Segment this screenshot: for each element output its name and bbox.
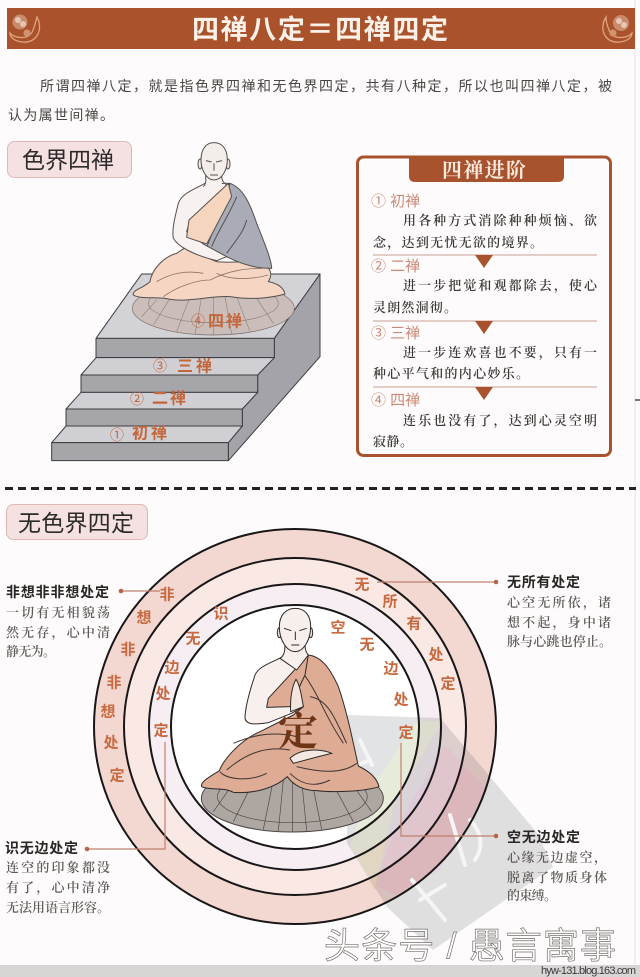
- icon: right lotus and crescent: [603, 15, 632, 42]
- callout: 无所有处定: 脉与心跳也停止。: [507, 634, 612, 649]
- stage 3: [371, 321, 597, 381]
- callout: 识无边处定: 无法用语言形容。: [6, 900, 110, 915]
- step labels: [110, 312, 242, 443]
- stage 1: ① 初禅: [371, 193, 420, 210]
- step labels: 初禅: [132, 424, 167, 442]
- ring labels: 非想非非想处定: [100, 586, 175, 784]
- callout: 空无边处定: 的束缚。: [507, 888, 557, 903]
- callout: 空无边处定: 心缘无边虚空，: [507, 850, 607, 866]
- heading: 色界四禅: 色界四禅: [22, 147, 114, 173]
- heading: 无色界四定: 无色界四定: [18, 510, 134, 536]
- icon: left lotus and crescent: [10, 14, 40, 42]
- callout: 无所有处定: 心空无所依，诸: [507, 595, 611, 611]
- title banner: [7, 8, 635, 49]
- step labels: ③: [153, 358, 167, 374]
- ring labels: 空无边处定: [330, 618, 414, 742]
- stage 4: 连乐也没有了，达到心灵空明: [403, 413, 597, 429]
- stage 3: 进一步连欢喜也不要，只有一: [403, 345, 597, 361]
- ring labels: 非想非非想处定: 非: [159, 586, 175, 604]
- stage 3: 种心平气和的内心妙乐。: [373, 366, 529, 381]
- ring labels: 无所有处定: [354, 576, 456, 692]
- stage 2: ② 二禅: [371, 258, 420, 275]
- stage 2: 灵朗然洞彻。: [373, 300, 457, 315]
- ring labels: 识无边处定: 定: [153, 722, 169, 740]
- stage 4: 寂静。: [373, 434, 413, 449]
- ring labels: 识无边处定: 识: [213, 606, 229, 622]
- callout: 非想非非想处定: 然无存，心中清: [6, 625, 110, 641]
- ring labels: 识无边处定: 边: [164, 658, 180, 676]
- callout: 非想非非想处定: 一切有无相貌荡: [6, 605, 110, 620]
- concentric rings diagram: [94, 529, 553, 950]
- step labels: 三禅: [177, 358, 212, 376]
- callout: 非想非非想处定: 静无为。: [6, 644, 56, 659]
- stairs: [52, 274, 320, 461]
- ring labels: 非想非非想处定: 定: [109, 766, 125, 784]
- stage 4: [371, 387, 597, 449]
- stage 2: 进一步把觉和观都除去，使心: [403, 278, 599, 294]
- ring outlines: [94, 529, 496, 924]
- stage 3: ③ 三禅: [371, 325, 420, 342]
- step labels: 二禅: [152, 390, 186, 408]
- ring labels: 非想非非想处定: 非: [120, 642, 136, 658]
- bottom scan band: [0, 965, 640, 977]
- ring labels: 空无边处定: 处: [393, 690, 409, 708]
- heading: 色界四禅: [8, 142, 132, 178]
- stage 2: [371, 255, 599, 315]
- watermark seal: [347, 715, 553, 950]
- callout: 非想非非想处定: [6, 584, 160, 659]
- callout: 识无边处定: 连空的印象都没: [6, 860, 110, 875]
- callout: 识无边处定: [5, 742, 165, 915]
- intro paragraph: 认为属世间禅。: [8, 107, 114, 123]
- stage 1: 念，达到无忧无欲的境界。: [373, 235, 543, 251]
- ring labels: 识无边处定: 无: [185, 630, 201, 648]
- ring labels: 无所有处定: 有: [406, 616, 422, 632]
- ring labels: 非想非非想处定: 非: [106, 674, 122, 692]
- ring labels: 空无边处定: 边: [383, 660, 399, 678]
- intro paragraph: 所谓四禅八定，就是指色界四禅和无色界四定，共有八种定，所以也叫四禅八定，被: [40, 78, 612, 94]
- heading: 无色界四定: [6, 504, 148, 540]
- ring labels: 空无边处定: 无: [359, 636, 375, 654]
- callout: 识无边处定: 识无边处定: [5, 840, 78, 856]
- stage 1: 用各种方式消除种种烦恼、欲: [403, 213, 597, 228]
- ring labels: 识无边处定: 处: [155, 684, 171, 702]
- step labels: 四禅: [208, 312, 242, 330]
- panel header: [409, 156, 564, 182]
- ring labels: 无所有处定: 定: [440, 674, 456, 692]
- ring labels: 非想非非想处定: 想: [100, 704, 116, 720]
- ring labels: 无所有处定: 无: [354, 576, 370, 594]
- watermark: 头条号 / 愚言寓事: 头条号 / 愚言寓事: [324, 925, 616, 966]
- ring labels: 非想非非想处定: 想: [136, 610, 152, 626]
- stage 1: [371, 193, 597, 251]
- ring labels: 非想非非想处定: 处: [103, 734, 119, 752]
- panel header: 四禅进阶: [442, 159, 526, 182]
- callout: 无所有处定: [377, 574, 612, 649]
- stage 4: ④ 四禅: [371, 392, 420, 409]
- callout: 空无边处定: 空无边处定: [507, 829, 580, 845]
- intro paragraph: [8, 78, 612, 123]
- callout: 空无边处定: 脱离了物质身体: [507, 870, 607, 885]
- source url: hyw-131.blog.163.com: [541, 965, 636, 977]
- callout: 空无边处定: [401, 743, 607, 903]
- step labels: ①: [110, 427, 124, 443]
- callout: 无所有处定: 想不起，身中诸: [507, 615, 611, 631]
- ring labels: 识无边处定: [153, 606, 229, 740]
- ring labels: 无所有处定: 所: [382, 594, 398, 610]
- ring labels: 空无边处定: 定: [398, 724, 414, 742]
- ring labels: 空无边处定: 空: [330, 618, 346, 636]
- ring fills: [94, 529, 496, 924]
- callout: 无所有处定: 无所有处定: [507, 574, 580, 590]
- step labels: ②: [130, 391, 144, 407]
- seated monk on disc: [132, 143, 294, 335]
- seated monk with 定: [201, 608, 383, 832]
- title text: 四禅八定＝四禅四定: [192, 15, 448, 45]
- seated monk with 定: 定: [278, 709, 318, 754]
- step labels: ④: [191, 313, 205, 329]
- panel: 四禅进阶: [358, 156, 610, 456]
- ring labels: 无所有处定: 处: [428, 646, 444, 664]
- callout: 非想非非想处定: 非想非非想处定: [6, 584, 109, 600]
- illustration: stepped platform with monk: [52, 143, 320, 461]
- callout: 识无边处定: 有了，心中清净: [6, 880, 110, 896]
